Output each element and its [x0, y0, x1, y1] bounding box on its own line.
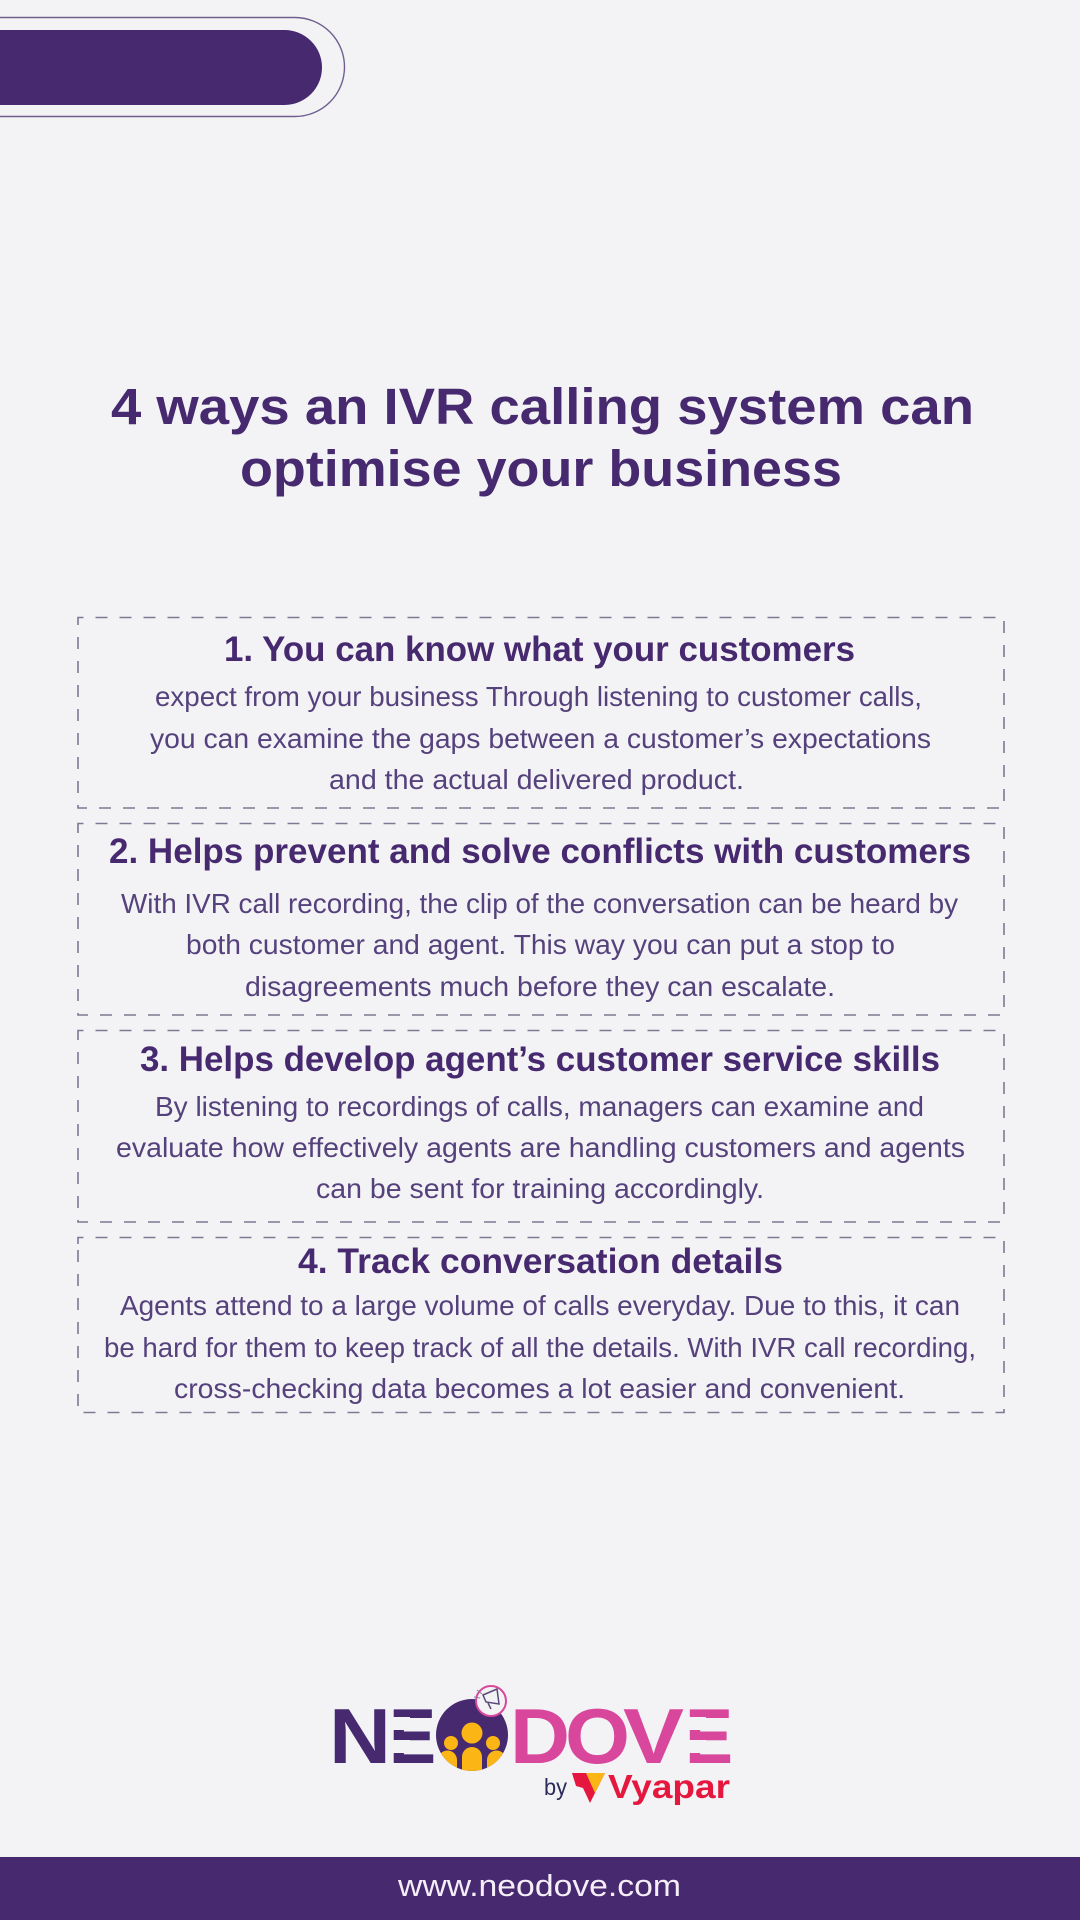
text: point 3 body: evaluate how effectively agents are handling customers and agents — [116, 1132, 965, 1163]
footer band — [0, 1857, 1080, 1920]
title: optimise your business — [240, 440, 842, 497]
text: point 4 body: Agents attend to a large volume of calls everyday. Due to this, it can — [120, 1290, 960, 1321]
text: point 3 body — [116, 1091, 965, 1204]
panel: point 3 — [78, 1030, 1004, 1222]
footer url: www.neodove.com — [397, 1868, 681, 1903]
icon: people circle with megaphone — [436, 1686, 508, 1772]
text: point 4 body: cross-checking data becomes a lot easier and convenient. — [174, 1373, 905, 1404]
logo wordmark: V — [623, 1692, 684, 1780]
logo wordmark: E — [685, 1692, 733, 1780]
logo wordmark — [329, 1692, 733, 1780]
text: point 1 body: you can examine the gaps between a customer’s expectations — [150, 723, 931, 754]
text: point 4 body: be hard for them to keep track of all the details. With IVR call recording, — [104, 1332, 976, 1363]
heading: point 1: 1. You can know what your customers — [224, 630, 855, 669]
heading: point 2: 2. Helps prevent and solve conflicts with customers — [109, 832, 971, 871]
heading: point 4: 4. Track conversation details — [298, 1242, 783, 1281]
panel: point 1 — [78, 618, 1004, 808]
text: point 2 body: With IVR call recording, the clip of the conversation can be heard by — [121, 888, 958, 919]
text: point 2 body: both customer and agent. This way you can put a stop to — [186, 929, 895, 960]
text: point 1 body: expect from your business Through listening to customer calls, — [155, 681, 922, 712]
text: point 2 body: disagreements much before they can escalate. — [245, 971, 835, 1002]
text: point 3 body: can be sent for training accordingly. — [316, 1173, 764, 1204]
text: point 4 body — [104, 1290, 976, 1404]
logo: NeoDove by Vyapar — [329, 1686, 733, 1805]
text: point 2 body — [121, 888, 958, 1002]
text: point 1 body: and the actual delivered product. — [329, 764, 744, 795]
icon: Vyapar mark — [572, 1773, 605, 1803]
logo wordmark: O — [565, 1692, 630, 1780]
heading: point 3: 3. Helps develop agent’s customer service skills — [140, 1040, 940, 1079]
Vyapar wordmark: Vyapar — [608, 1768, 730, 1805]
logo wordmark: E — [389, 1692, 436, 1780]
title: 4 ways an IVR calling system can — [111, 378, 974, 435]
panel: point 4 — [78, 1238, 1004, 1412]
by label: by — [544, 1774, 567, 1800]
panel: point 2 — [78, 824, 1004, 1015]
decorative top pill — [0, 18, 344, 116]
logo wordmark: N — [329, 1692, 391, 1780]
logo wordmark: D — [510, 1692, 570, 1780]
text: point 3 body: By listening to recordings of calls, managers can examine and — [155, 1091, 924, 1122]
text: point 1 body — [150, 681, 931, 795]
title — [111, 378, 974, 497]
